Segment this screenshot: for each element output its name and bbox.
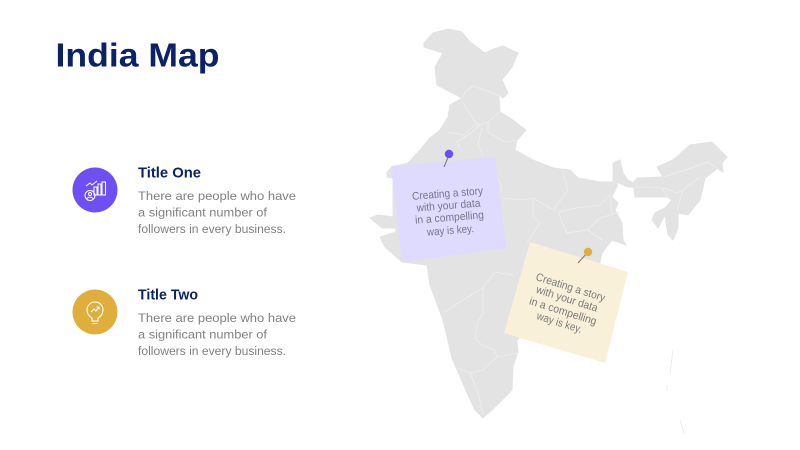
sticky note: purple: Creating a story [412,185,484,203]
pin: purple [444,150,453,167]
body text: There are people who have [138,311,296,325]
item: title two [72,286,296,358]
sticky note: yellow: with your data [534,284,600,315]
sticky note: purple: with your data [415,197,482,215]
heading: Title Two [138,286,198,304]
sticky note: yellow: Creating a story [534,271,607,305]
body text [138,311,296,358]
sticky note: purple [391,157,506,262]
title: India Map [56,38,220,74]
item: title one [72,164,296,236]
sticky note: purple: in a compelling [415,209,484,227]
sticky note: purple: way is key. [426,223,474,239]
sticky note: yellow [504,242,628,363]
heading: Title One [138,164,201,182]
icon: growth chart and person [72,168,118,212]
body text: a significant number of [138,328,268,342]
body text: followers in every business. [138,344,286,358]
sticky note: yellow: in a compelling [528,295,598,328]
sticky note: yellow: way is key. [534,310,584,336]
body text: There are people who have [138,189,296,203]
body text [138,189,296,236]
body text: a significant number of [138,206,268,220]
pin: yellow [578,248,592,263]
map of India [370,29,727,433]
icon: light bulb [72,290,118,334]
body text: followers in every business. [138,222,286,236]
